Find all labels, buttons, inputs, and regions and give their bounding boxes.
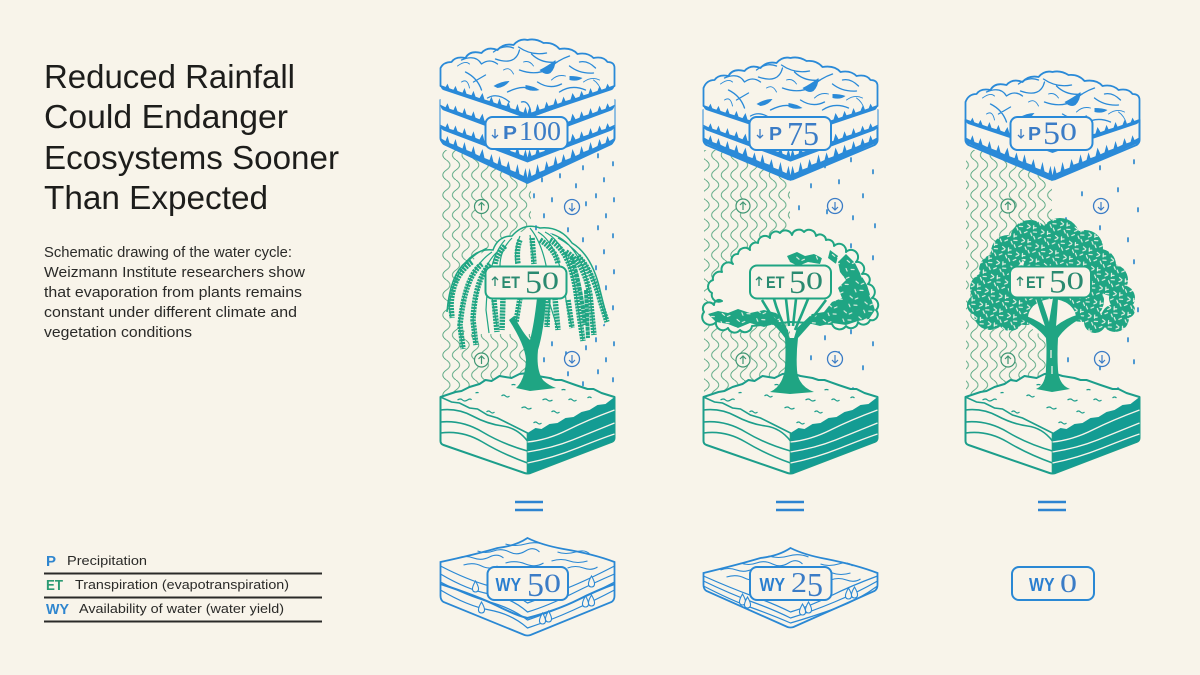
legend: water yield: WY (46, 601, 69, 618)
column 2: P75 (702, 57, 878, 627)
ET badge: 5 (789, 265, 806, 301)
WY badge (750, 567, 832, 604)
P badge: 75 (787, 116, 819, 153)
title: Than Expected (44, 179, 268, 216)
title: Reduced Rainfall (44, 58, 295, 95)
column 1: P100 (440, 39, 615, 635)
evapotranspiration waves (966, 150, 1052, 400)
title: Could Endanger (44, 98, 288, 135)
shaded foliage (708, 250, 875, 328)
WY badge: WY (1029, 575, 1054, 595)
legend: precipitation: Precipitation (67, 554, 147, 568)
water block (704, 548, 878, 628)
WY badge: WY (760, 575, 785, 595)
cloud stack (966, 71, 1140, 181)
P badge: 5 (1043, 116, 1060, 152)
P badge (486, 116, 568, 149)
equals sign (776, 502, 804, 510)
WY badge: 2 (791, 568, 807, 599)
ET badge: ET (766, 273, 785, 292)
P badge (1010, 116, 1092, 152)
legend: precipitation (46, 553, 147, 570)
description text (44, 245, 306, 341)
equals sign (1038, 502, 1066, 510)
WY badge: 0 (1060, 569, 1077, 598)
water block (440, 538, 614, 636)
oak outline tree (702, 230, 878, 394)
ET badge: 5 (525, 265, 542, 301)
evapotranspiration waves (704, 150, 790, 400)
legend: water yield: Availability of water (water yield) (79, 602, 284, 616)
legend: transpiration: Transpiration (evapotranspiration) (75, 578, 289, 592)
title (44, 58, 339, 216)
description text: that evaporation from plants remains (44, 285, 302, 301)
rain (530, 150, 615, 390)
soil block (440, 373, 614, 474)
up and down arrow circles (736, 198, 842, 367)
WY badge: 5 (527, 567, 544, 604)
ET badge: 0 (1066, 268, 1084, 295)
up and down arrow circles (474, 200, 580, 367)
trunk and branches (1018, 298, 1082, 392)
legend (44, 553, 322, 622)
WY badge: WY (496, 575, 521, 595)
legend: transpiration (46, 577, 289, 594)
P badge: P (1028, 124, 1041, 144)
legend: transpiration: ET (46, 577, 63, 594)
ET badge: ET (1026, 273, 1045, 292)
leafy tree (967, 218, 1135, 392)
rain (793, 150, 878, 390)
ET badge: 0 (806, 268, 823, 295)
description text: constant under different climate and (44, 305, 297, 321)
title: Ecosystems Sooner (44, 139, 339, 176)
column 3: P50 (966, 71, 1141, 600)
P badge (750, 116, 831, 153)
WY badge: 5 (807, 567, 823, 604)
rain (1056, 150, 1141, 390)
trunk and branches (770, 316, 814, 394)
cloud stack (704, 57, 878, 181)
ET badge: 5 (1049, 264, 1066, 300)
description text: vegetation conditions (44, 325, 192, 341)
P badge: P (769, 124, 782, 144)
soil block (966, 373, 1140, 474)
willow tree (447, 226, 607, 391)
WY badge (1012, 567, 1094, 600)
ET badge (486, 265, 566, 301)
ET badge (750, 265, 831, 301)
cloud stack (440, 39, 614, 184)
ET badge: ET (502, 273, 521, 292)
soil block (704, 373, 878, 474)
legend: water yield (46, 601, 284, 618)
P badge: 100 (519, 116, 561, 146)
description text: Schematic drawing of the water cycle: (44, 245, 292, 261)
evapotranspiration waves (441, 150, 531, 400)
description text: Weizmann Institute researchers show (44, 265, 306, 281)
P badge: 0 (1060, 119, 1077, 146)
up and down arrow circles (1001, 198, 1110, 367)
crown foliage (967, 218, 1135, 333)
ET badge (1010, 264, 1091, 300)
WY badge (488, 567, 568, 604)
crown outline (702, 230, 878, 333)
legend: precipitation: P (46, 553, 56, 570)
WY badge: 0 (544, 569, 561, 598)
ET badge: 0 (542, 268, 559, 295)
P badge: P (503, 123, 517, 143)
equals sign (515, 502, 543, 510)
